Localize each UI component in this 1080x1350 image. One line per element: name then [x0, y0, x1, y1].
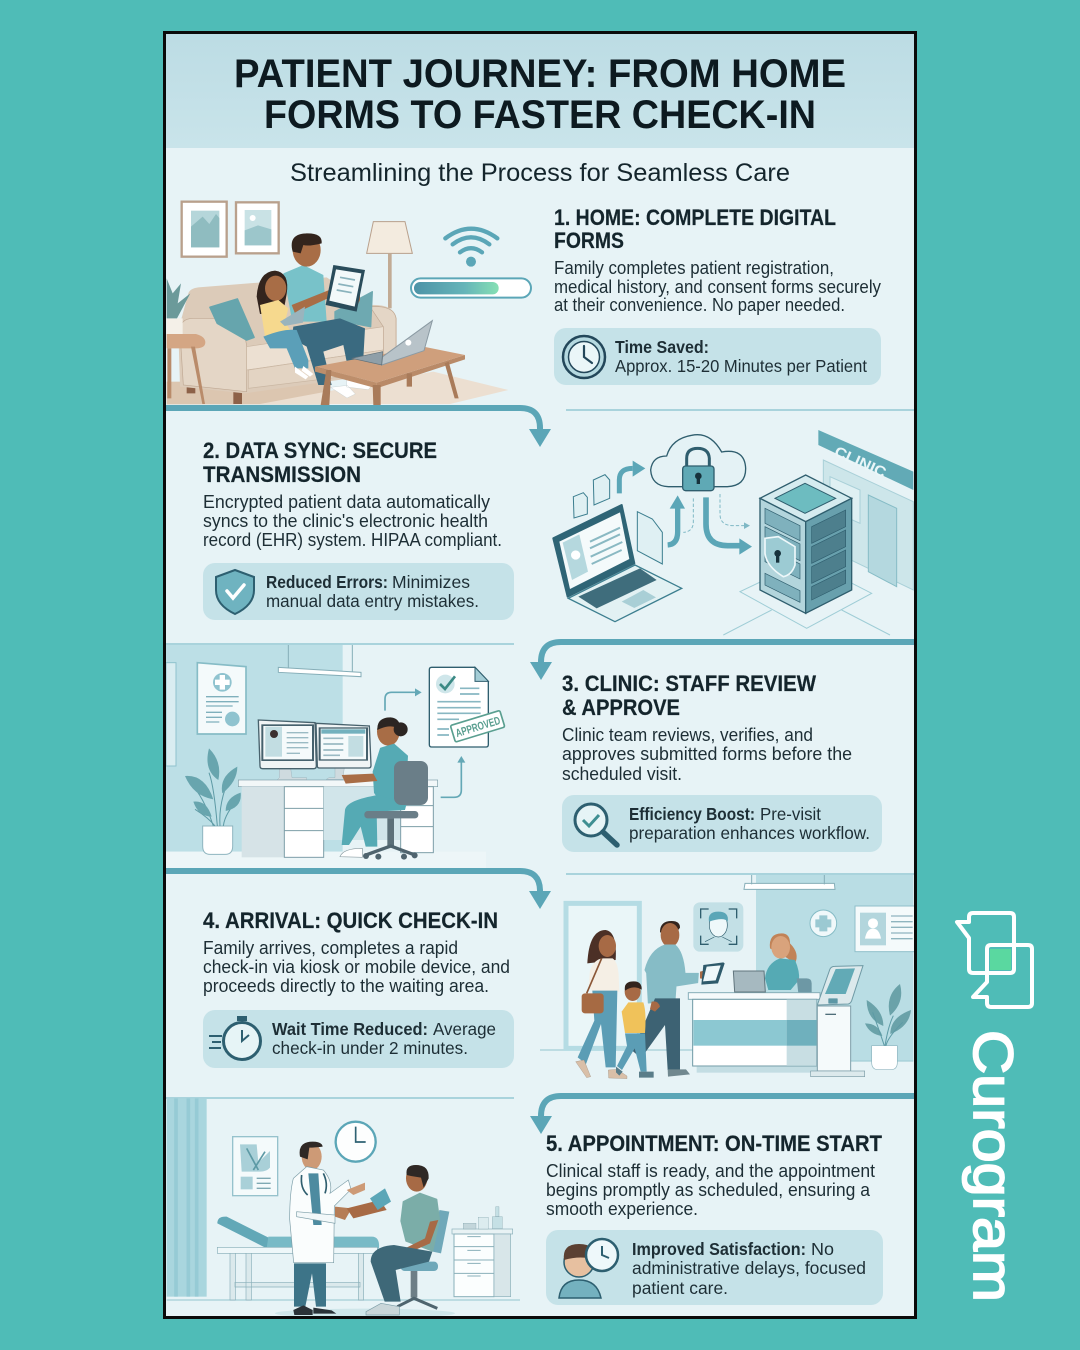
step 3 heading: & APPROVE — [562, 695, 680, 720]
callout: efficiency boost: Pre-visit — [760, 804, 821, 824]
step 1 body text: at their convenience. No paper needed. — [554, 295, 845, 315]
illustration: family checking in at reception — [540, 875, 915, 1079]
step 2 body text: record (EHR) system. HIPAA compliant. — [203, 530, 502, 550]
server — [760, 475, 852, 613]
callout: time saved: Time Saved: — [615, 337, 709, 357]
step 3 heading: 3. CLINIC: STAFF REVIEW — [562, 671, 816, 696]
card border — [164, 32, 916, 1318]
step 5 body text — [546, 1161, 875, 1219]
callout: improved satisfaction: No — [811, 1239, 834, 1259]
plant — [185, 748, 241, 854]
callout: improved satisfaction: administrative delays, focused — [632, 1258, 866, 1278]
man — [283, 265, 327, 322]
clinic building: CLINIC — [832, 444, 889, 482]
illustration: family on sofa completing forms — [167, 202, 531, 405]
step 1 heading: FORMS — [554, 228, 624, 253]
girl — [257, 271, 287, 314]
plant — [865, 984, 911, 1070]
callout: time saved — [554, 328, 881, 385]
step 5 body text: smooth experience. — [546, 1199, 698, 1219]
callout: reduced errors — [203, 563, 514, 620]
wordmark: Curogram — [962, 1030, 1025, 1302]
arrow: step 4 to step 5 — [530, 1096, 914, 1134]
step 1 body text — [554, 258, 881, 315]
step 2 body text — [203, 492, 502, 550]
cloud with lock — [651, 435, 746, 491]
icon: face scan — [693, 902, 743, 952]
step 1 heading — [555, 209, 836, 248]
infographic card — [166, 34, 915, 1318]
clinic building — [818, 430, 913, 590]
nurse at desk — [340, 717, 428, 860]
callout: wait time reduced — [203, 1010, 514, 1068]
progress bar — [411, 278, 531, 298]
icon: smiling patient with clock — [559, 1239, 618, 1298]
icon: clock — [563, 336, 605, 378]
step 3 body text: approves submitted forms before the — [562, 744, 852, 764]
wall clock — [336, 1122, 376, 1162]
step 3 heading — [562, 671, 816, 720]
callout: wait time reduced: Average — [433, 1019, 496, 1039]
family — [576, 921, 725, 1079]
step 5 body text: begins promptly as scheduled, ensuring a — [546, 1180, 871, 1200]
cabinet — [452, 1207, 513, 1297]
kiosk — [811, 966, 865, 1077]
monitors — [258, 720, 371, 780]
callout: improved satisfaction: Improved Satisfaction: — [632, 1239, 806, 1259]
desk — [238, 780, 438, 857]
brand logo: Curogram — [957, 913, 1032, 1302]
reception desk — [688, 971, 820, 1073]
flow arrows — [619, 461, 752, 555]
panel: step 1 home — [167, 202, 881, 405]
illustration: doctor greeting patient — [167, 1098, 520, 1318]
step 5 body text: Clinical staff is ready, and the appointment — [546, 1161, 875, 1181]
step 2 heading: 2. DATA SYNC: SECURE — [203, 438, 437, 463]
callout: reduced errors: manual data entry mistakes. — [266, 591, 479, 611]
side table and plant — [166, 318, 183, 334]
callout: wait time reduced: Wait Time Reduced: — [272, 1019, 428, 1039]
icon: wifi — [445, 229, 497, 267]
icon: magnifier check — [575, 804, 617, 845]
callout: improved satisfaction — [546, 1230, 883, 1305]
panel: step 2 data sync — [203, 430, 913, 635]
plus sign — [810, 910, 837, 937]
x-ray poster — [233, 1137, 278, 1196]
icon: overlapping chat bubbles — [957, 913, 1032, 1007]
step 4 body text: proceeds directly to the waiting area. — [203, 976, 489, 996]
callout: reduced errors: Reduced Errors: — [266, 572, 388, 592]
sofa — [178, 277, 397, 393]
callout: efficiency boost: Efficiency Boost: — [629, 804, 755, 824]
illustration: staff member reviewing forms — [166, 645, 505, 868]
panel: step 4 arrival — [203, 875, 915, 1079]
step 2 body text: Encrypted patient data automatically — [203, 492, 490, 512]
laptop — [553, 505, 682, 622]
title band — [166, 34, 914, 148]
step 3 body text: Clinic team reviews, verifies, and — [562, 725, 813, 745]
receptionist — [765, 933, 812, 993]
approved document — [429, 667, 505, 747]
exam table — [217, 1217, 379, 1300]
callout: wait time reduced: check-in under 2 minutes. — [272, 1038, 468, 1058]
arrow: step 2 to step 3 — [530, 642, 914, 680]
ceiling lamp — [744, 875, 835, 889]
tablet — [326, 265, 365, 312]
step 4 body text — [203, 938, 510, 996]
panel: step 5 appointment — [167, 1098, 883, 1318]
documents — [573, 475, 662, 564]
step 2 heading: TRANSMISSION — [203, 462, 361, 487]
flow arrows — [385, 688, 465, 797]
approved document: APPROVED — [454, 715, 502, 740]
arrow: step 3 to step 4 — [166, 871, 551, 909]
doctor — [290, 1142, 365, 1315]
step 1 heading: 1. HOME: COMPLETE DIGITAL — [554, 205, 836, 230]
step 4 body text: check-in via kiosk or mobile device, and — [203, 957, 510, 977]
title band: PATIENT JOURNEY: FROM HOME — [234, 52, 846, 96]
arrow: step 1 to step 2 — [166, 408, 551, 447]
step 1 body text: medical history, and consent forms securely — [554, 277, 881, 297]
callout: efficiency boost: preparation enhances workflow. — [629, 823, 870, 843]
id poster — [855, 906, 915, 952]
patient — [347, 1165, 449, 1315]
coffee table — [331, 378, 372, 398]
panel: step 3 clinic review — [166, 645, 882, 868]
step 2 heading — [203, 442, 436, 482]
callout: efficiency boost — [562, 795, 882, 852]
icon: shield check — [216, 570, 254, 614]
step 4 heading: 4. ARRIVAL: QUICK CHECK-IN — [203, 908, 498, 933]
step 3 body text: scheduled visit. — [562, 764, 682, 784]
title band: FORMS TO FASTER CHECK-IN — [264, 93, 816, 137]
step 4 body text: Family arrives, completes a rapid — [203, 938, 458, 958]
callout: time saved: Approx. 15-20 Minutes per Patient — [615, 356, 867, 376]
subtitle: Streamlining the Process for Seamless Care — [290, 159, 790, 187]
step 2 body text: syncs to the clinic's electronic health — [203, 511, 488, 531]
callout: reduced errors: Minimizes — [392, 572, 470, 592]
ceiling lamp — [278, 645, 361, 677]
step 5 heading: 5. APPOINTMENT: ON-TIME START — [546, 1131, 883, 1156]
laptop — [352, 321, 432, 365]
icon: stopwatch — [209, 1016, 260, 1060]
callout: improved satisfaction: patient care. — [632, 1278, 728, 1298]
entrance door — [566, 903, 639, 1048]
step 3 body text — [562, 725, 852, 784]
illustration: secure data transfer to clinic server — [553, 430, 913, 635]
wall poster — [197, 663, 246, 734]
curtain — [167, 1098, 207, 1297]
step 1 body text: Family completes patient registration, — [554, 258, 834, 278]
